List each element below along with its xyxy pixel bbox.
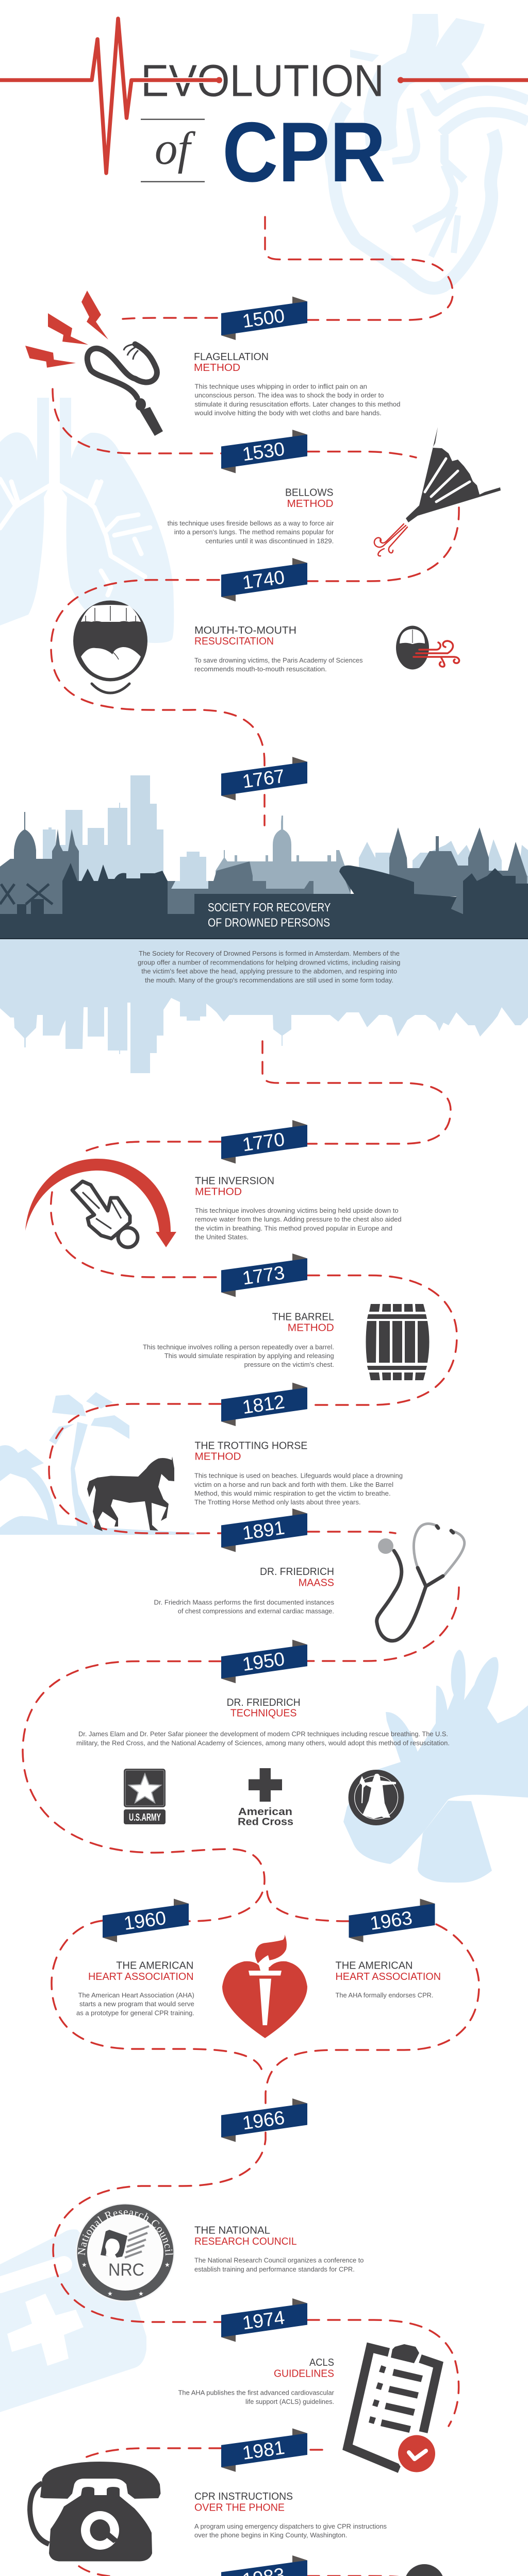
icon: infant xyxy=(364,2564,455,2576)
text block: bellows method: METHOD xyxy=(287,498,333,510)
text block: dr friedrich maass: MAASS xyxy=(299,1577,334,1588)
text block: barrel method: This would simulate respiration by applying and releasing xyxy=(164,1352,334,1360)
background: pale hand xyxy=(343,1650,528,1883)
text block: flagellation method: unconscious person. The idea was to shock the body in order to xyxy=(195,392,384,399)
background: skyline back layer xyxy=(43,775,528,896)
banner: 1974: 1974 xyxy=(241,2307,286,2334)
text block: flagellation method: METHOD xyxy=(194,362,240,374)
logo: American Red Cross: Red Cross xyxy=(238,1817,293,1828)
text block: flagellation method: FLAGELLATION xyxy=(194,351,269,363)
text block: american heart association 1963: THE AMERICAN xyxy=(335,1960,412,1972)
text block: dr friedrich techniques: military, the Red Cross, and the National Academy of Sciences, among many others, would adopt this method of resuscitation. xyxy=(76,1739,450,1747)
text block: dr friedrich techniques: TECHNIQUES xyxy=(230,1708,297,1719)
logo: U.S. Army xyxy=(124,1769,166,1824)
banner: 1500 xyxy=(221,297,307,340)
text block: national research council: The National Research Council organizes a conference to xyxy=(194,2257,364,2264)
panel: society for recovery of drowned persons: OF DROWNED PERSONS xyxy=(208,916,330,929)
background: pale medical bag xyxy=(0,2229,146,2412)
background: pale lungs xyxy=(0,398,174,643)
logo: National Academy of Sciences seal xyxy=(349,1770,404,1825)
text block: inversion method: remove water from the lungs. Adding pressure to the chest also aided xyxy=(195,1215,402,1223)
logo: American Red Cross: American xyxy=(238,1806,292,1818)
background: skyline front layer xyxy=(0,812,528,939)
text block: national research council xyxy=(194,2225,364,2273)
text block: barrel method: METHOD xyxy=(288,1322,334,1333)
banner: 1891: 1891 xyxy=(241,1517,286,1544)
icon: inversion arrow and person xyxy=(25,1159,176,1247)
icon: barrel xyxy=(366,1304,429,1380)
text block: inversion method: METHOD xyxy=(195,1186,242,1197)
text block: american heart association 1960: THE AMERICAN xyxy=(116,1960,193,1972)
text block: barrel method: This technique involves rolling a person repeatedly over a barrel. xyxy=(143,1343,334,1351)
banner: 1812 xyxy=(221,1383,307,1426)
title: Evolution of CPR: of xyxy=(155,123,196,174)
banner: 1950 xyxy=(221,1640,307,1683)
text block: dr friedrich techniques xyxy=(76,1697,450,1747)
text block: cpr instructions over the phone: A program using emergency dispatchers to give CPR instructions xyxy=(194,2522,387,2530)
panel: society for recovery of drowned persons: The Society for Recovery of Drowned Persons is formed in Amsterdam. Members of the xyxy=(139,950,400,957)
title: Evolution of CPR: CPR xyxy=(222,105,386,199)
icon: open mouth xyxy=(73,601,147,693)
text block: trotting horse method: Method, this would mimic respiration to get the victim to breathe. xyxy=(194,1489,391,1497)
banner: 1773 xyxy=(221,1253,307,1297)
banner: 1740 xyxy=(221,558,307,602)
banner: 1960 xyxy=(103,1899,189,1942)
background: skyline middle layer xyxy=(216,816,528,896)
text block: national research council: RESEARCH COUNCIL xyxy=(194,2236,297,2247)
icon: heart and torch xyxy=(222,1934,307,2038)
text block: trotting horse method: victim on a horse and run back and forth with them. Like the Barrel xyxy=(194,1481,393,1488)
text block: flagellation method: stimulate it during resuscitation efforts. Later changes to this method xyxy=(195,400,400,408)
banner: 1530: 1530 xyxy=(241,438,286,465)
text block: bellows method: BELLOWS xyxy=(285,487,333,499)
text block: flagellation method: This technique uses whipping in order to inflict pain on an xyxy=(195,382,367,390)
banner: 1963: 1963 xyxy=(369,1907,414,1934)
banner: 1891 xyxy=(221,1509,307,1552)
text block: acls guidelines: life support (ACLS) guidelines. xyxy=(245,2398,334,2405)
icon: heartbeat line xyxy=(0,19,528,173)
text block: mouth-to-mouth: MOUTH-TO-MOUTH xyxy=(194,625,296,636)
logo: National Research Council seal xyxy=(76,2203,175,2302)
text block: dr friedrich maass: DR. FRIEDRICH xyxy=(260,1566,334,1578)
text block: acls guidelines: ACLS xyxy=(309,2357,334,2368)
logo: National Research Council seal: ★ xyxy=(164,2261,170,2268)
logo: National Research Council seal: National Research Council xyxy=(78,2210,173,2256)
banner: 1500: 1500 xyxy=(241,305,286,332)
icon: bellows xyxy=(374,427,501,556)
text block: american heart association 1963: HEART ASSOCIATION xyxy=(335,1971,441,1982)
text block: bellows method: centuries until it was discontinued in 1829. xyxy=(205,537,334,545)
banner: 1963 xyxy=(349,1899,435,1942)
panel: society for recovery of drowned persons: SOCIETY FOR RECOVERY xyxy=(208,901,331,914)
text block: inversion method: This technique involves drowning victims being held upside down to xyxy=(195,1207,399,1214)
text block: dr friedrich maass xyxy=(154,1566,334,1615)
panel: society for recovery of drowned persons xyxy=(138,901,400,984)
text block: dr friedrich techniques: Dr. James Elam and Dr. Peter Safar pioneer the development of modern CPR techniques including rescue breathing. The U.S. xyxy=(78,1730,448,1738)
text block: national research council: THE NATIONAL xyxy=(194,2225,270,2236)
logo: National Research Council seal: ★ xyxy=(138,2290,144,2297)
text block: american heart association 1960: The American Heart Association (AHA) xyxy=(78,1991,194,1999)
text block: barrel method: pressure on the victim's chest. xyxy=(244,1361,334,1368)
banner: 1770: 1770 xyxy=(241,1128,286,1156)
banner: 1767: 1767 xyxy=(241,765,286,792)
text block: mouth-to-mouth: To save drowning victims, the Paris Academy of Sciences xyxy=(194,656,363,664)
logo: U.S. Army: U.S.ARMY xyxy=(129,1812,161,1823)
text block: cpr instructions over the phone xyxy=(194,2491,387,2539)
title: Evolution of CPR: EVOLUTION xyxy=(141,56,384,106)
text block: american heart association 1960: HEART ASSOCIATION xyxy=(88,1971,194,1982)
text block: trotting horse method: METHOD xyxy=(195,1451,241,1463)
text block: inversion method xyxy=(195,1176,402,1241)
banner: 1950: 1950 xyxy=(241,1648,286,1675)
banner: 1812: 1812 xyxy=(241,1391,286,1418)
text block: bellows method xyxy=(168,487,334,545)
icon: whip and lightning bolts xyxy=(25,291,163,436)
banner: 1740: 1740 xyxy=(241,566,286,594)
banner: 1767 xyxy=(221,757,307,801)
text block: dr friedrich maass: Dr. Friedrich Maass performs the first documented instances xyxy=(154,1598,334,1606)
text block: cpr instructions over the phone: over the phone begins in King County, Washington. xyxy=(194,2531,347,2539)
banner: 1530 xyxy=(221,430,307,473)
logo: American Red Cross xyxy=(238,1768,293,1828)
icon: mouth blowing air xyxy=(396,625,459,670)
banner: 1960: 1960 xyxy=(122,1907,168,1934)
timeline dashed path xyxy=(23,217,479,2576)
text block: bellows method: into a person's lungs. The method remains popular for xyxy=(174,528,334,536)
text block: american heart association 1963 xyxy=(335,1960,441,1999)
text block: flagellation method xyxy=(194,351,400,417)
text block: mouth-to-mouth xyxy=(194,625,363,673)
text block: trotting horse method: This technique is used on beaches. Lifeguards would place a drowning xyxy=(194,1471,403,1480)
text block: bellows method: this technique uses fireside bellows as a way to force air xyxy=(168,519,334,527)
text block: cpr instructions over the phone: CPR INSTRUCTIONS xyxy=(194,2491,293,2502)
banner: 1983 xyxy=(221,2555,307,2576)
text block: cpr instructions over the phone: OVER THE PHONE xyxy=(194,2502,285,2513)
text block: american heart association 1960: as a prototype for general CPR training. xyxy=(76,2009,194,2016)
text block: inversion method: THE INVERSION xyxy=(195,1176,274,1187)
text block: american heart association 1960: starts a new program that would serve xyxy=(79,2000,194,2008)
text block: dr friedrich maass: of chest compressions and external cardiac massage. xyxy=(178,1607,334,1615)
panel: society for recovery of drowned persons: the mouth. Many of the group's recommendations are still used in some form today. xyxy=(145,976,393,984)
text block: trotting horse method: THE TROTTING HORSE xyxy=(195,1440,307,1452)
panel: society for recovery of drowned persons: the victim's feet above the head, applying pressure to the abdomen, and respiring into xyxy=(141,968,397,975)
text block: acls guidelines: GUIDELINES xyxy=(274,2368,334,2379)
background: pale heart xyxy=(331,14,528,289)
text block: american heart association 1960 xyxy=(76,1960,194,2016)
background: mirrored skyline xyxy=(0,939,528,1073)
banner: 1773: 1773 xyxy=(241,1262,286,1289)
text block: acls guidelines xyxy=(178,2357,335,2405)
banner: 1770 xyxy=(221,1120,307,1163)
text block: acls guidelines: The AHA publishes the first advanced cardiovascular xyxy=(178,2389,335,2397)
text block: american heart association 1963: The AHA formally endorses CPR. xyxy=(335,1991,433,1999)
text block: barrel method: THE BARREL xyxy=(272,1312,334,1323)
text block: barrel method xyxy=(143,1312,334,1368)
text block: national research council: establish training and performance standards for CPR. xyxy=(194,2265,355,2273)
banner: 1981: 1981 xyxy=(241,2437,286,2464)
text block: mouth-to-mouth: recommends mouth-to-mouth resuscitation. xyxy=(194,665,327,673)
banner: 1966 xyxy=(221,2098,307,2142)
icon: clipboard checklist xyxy=(348,2344,438,2474)
banner: 1974 xyxy=(221,2298,307,2342)
text block: inversion method: the United States. xyxy=(195,1233,249,1241)
icon: stethoscope xyxy=(377,1524,465,1641)
background: palm trees and beach xyxy=(0,1392,194,1535)
text block: trotting horse method xyxy=(194,1440,403,1506)
text block: inversion method: the victim in breathing. This method proved popular in Europe and xyxy=(195,1224,392,1232)
logo: National Research Council seal: ★ xyxy=(107,2290,113,2297)
text block: flagellation method: would involve hitting the body with wet cloths and bare hands. xyxy=(194,409,382,417)
banner: 1966: 1966 xyxy=(241,2107,286,2134)
title: Evolution of CPR xyxy=(141,56,386,199)
logo: National Research Council seal: NRC xyxy=(108,2260,144,2280)
logo: National Research Council seal: ★ xyxy=(81,2261,87,2268)
text block: mouth-to-mouth: RESUSCITATION xyxy=(194,636,274,647)
panel: society for recovery of drowned persons: group offer a number of recommendations for helping drowned victims, including raising xyxy=(138,958,400,966)
icon: horse xyxy=(87,1456,174,1531)
text block: dr friedrich techniques: DR. FRIEDRICH xyxy=(227,1697,301,1708)
icon: rotary telephone xyxy=(30,2462,161,2562)
banner: 1981 xyxy=(221,2428,307,2472)
text block: trotting horse method: The Trotting Horse Method only lasts about three years. xyxy=(194,1498,361,1506)
